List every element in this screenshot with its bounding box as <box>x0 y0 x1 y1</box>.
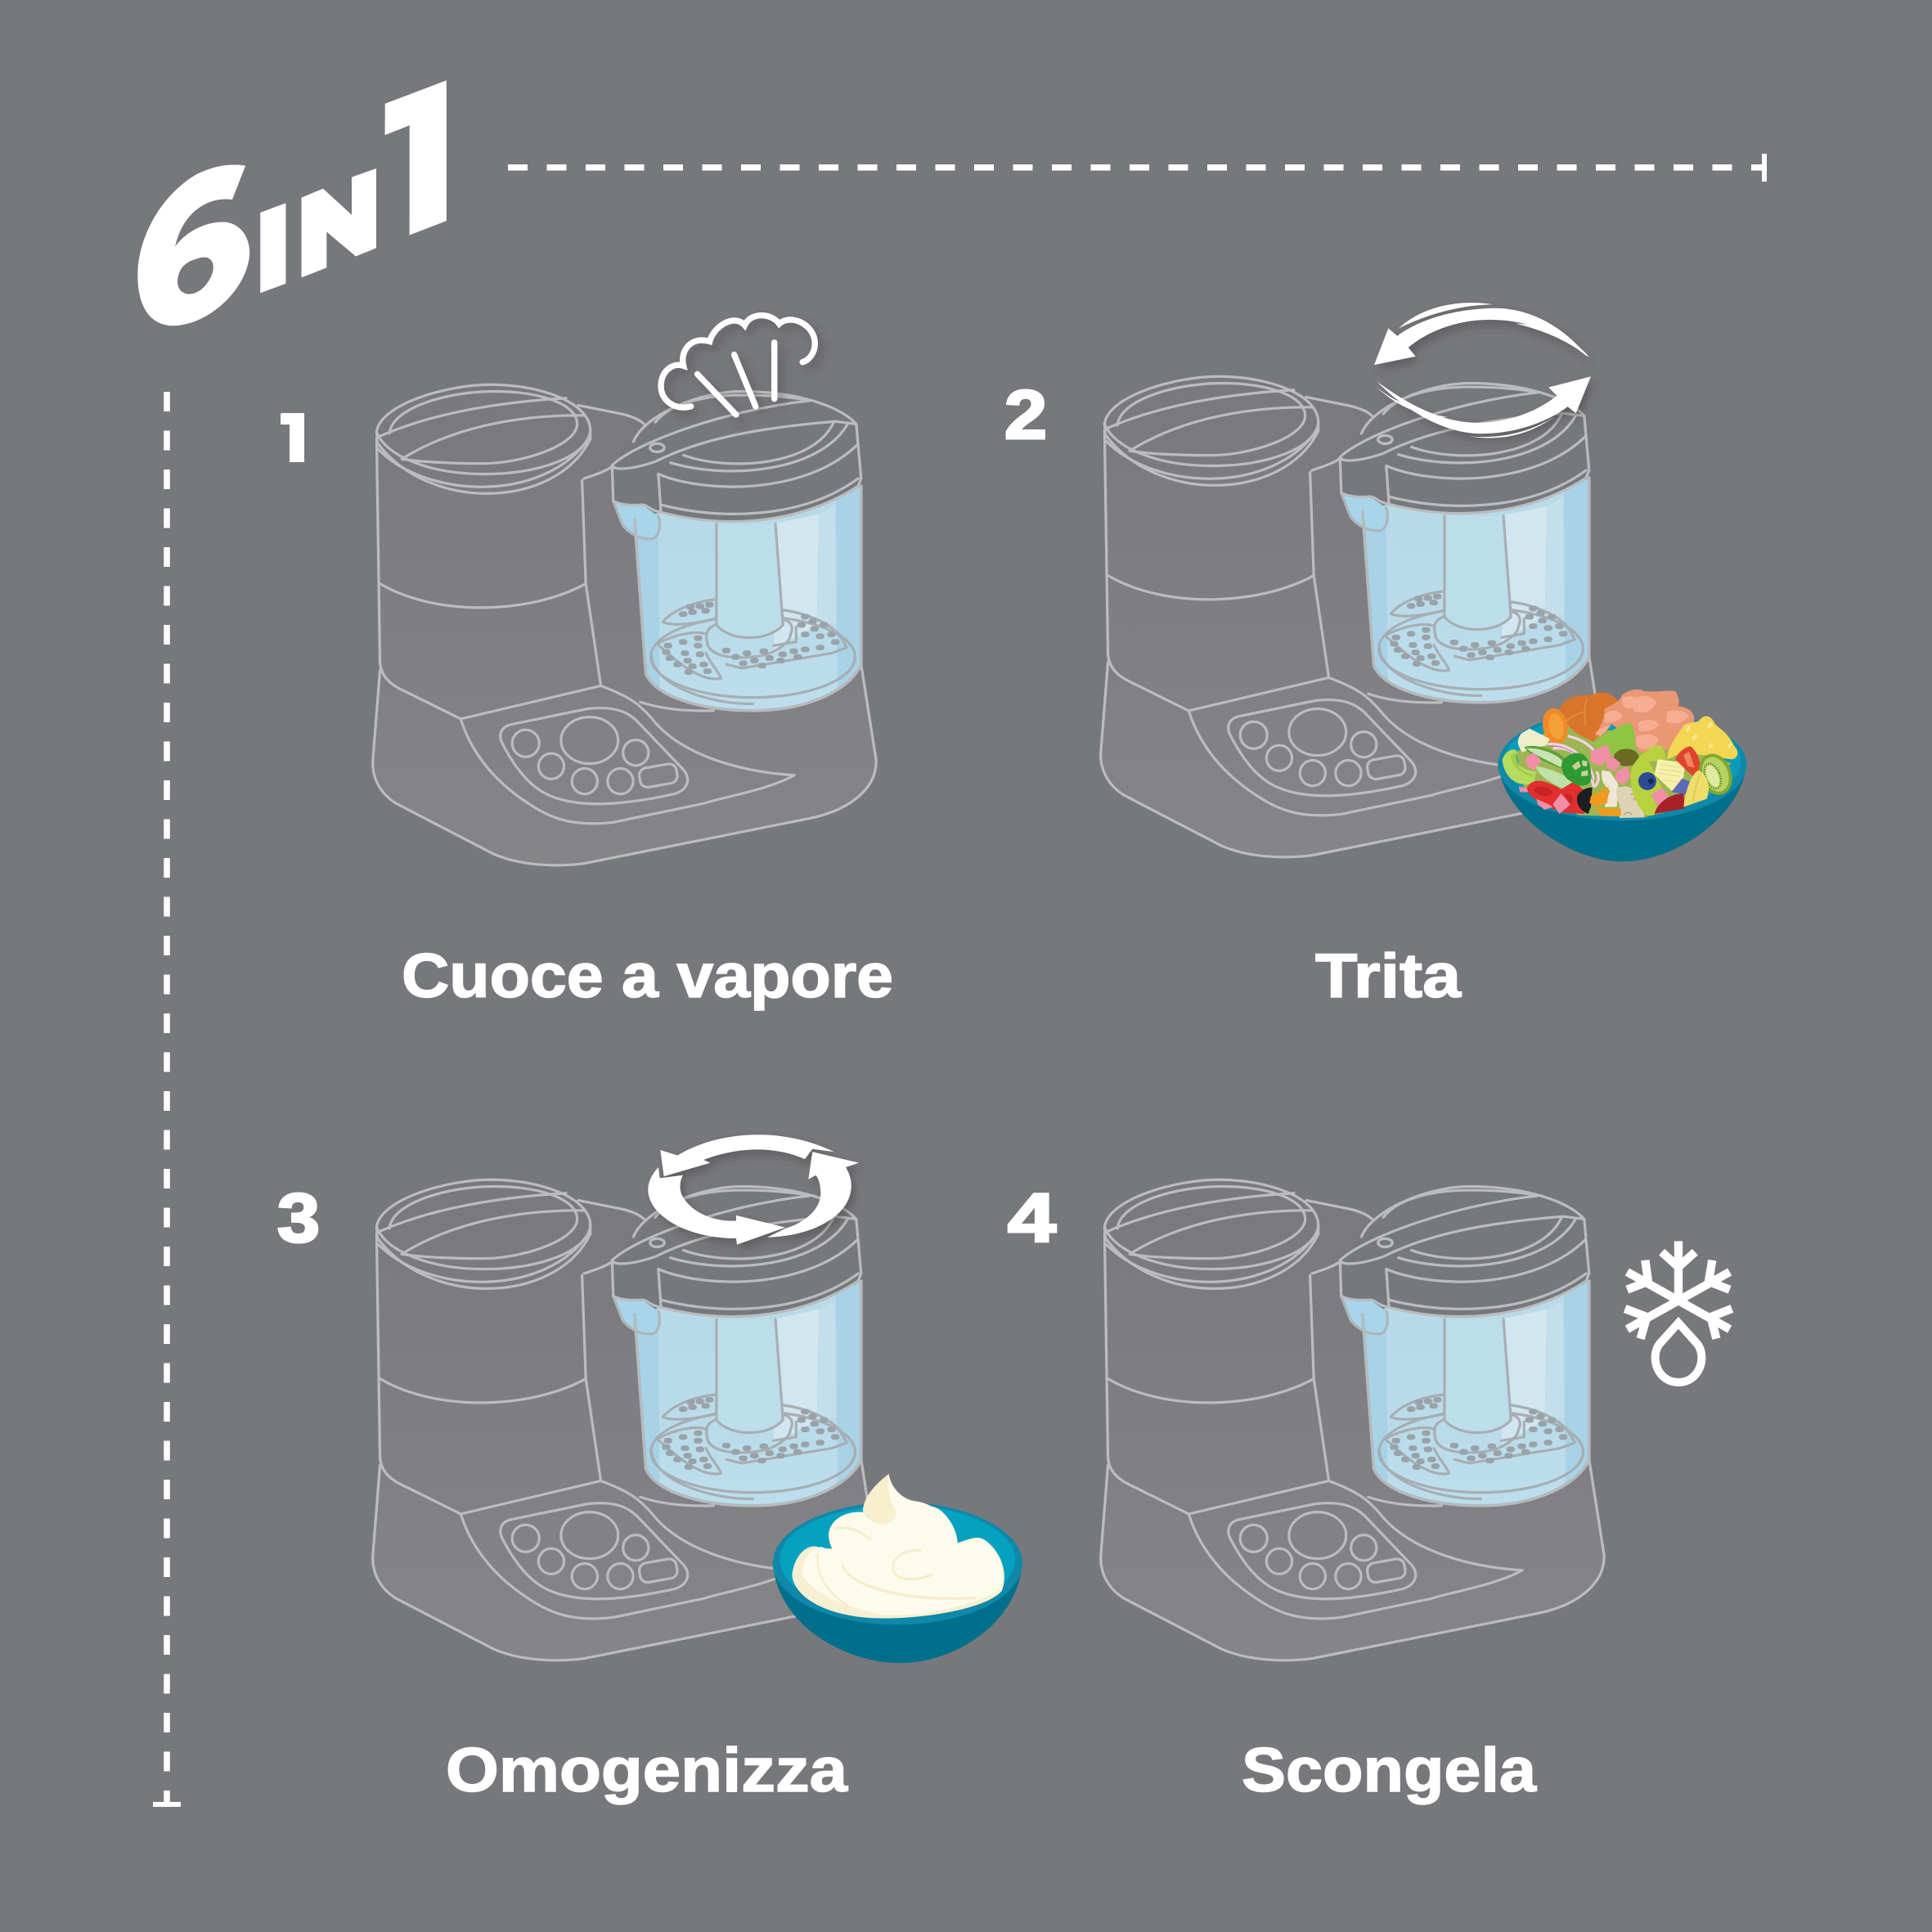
tomato and salami <box>1527 781 1589 814</box>
title: 6 in 1 <box>115 12 513 380</box>
jalapeno <box>1562 753 1591 785</box>
bowl of chopped salad <box>1498 690 1746 861</box>
feta block left <box>1518 729 1550 753</box>
mushrooms <box>1602 771 1618 807</box>
bowl body <box>773 1566 1022 1663</box>
olive brown <box>1614 748 1639 766</box>
step 2 machine <box>1101 376 1604 857</box>
ham cubes <box>1519 744 1669 814</box>
step 4 label: Scongela <box>1242 1736 1537 1805</box>
icon: blend arrows <box>648 1134 859 1245</box>
bowl of cream <box>773 1474 1022 1663</box>
title: 6 in 1: 1 <box>352 12 513 302</box>
blueberry <box>1638 772 1656 790</box>
step 3 number: 3 <box>277 1179 320 1256</box>
title: 6 in 1: 6 <box>115 97 276 380</box>
dashed line: top <box>508 154 1764 182</box>
lettuce <box>1593 722 1635 754</box>
bowl rim <box>773 1502 1022 1624</box>
bowl rim <box>1498 709 1746 820</box>
corn and pineapple <box>1667 716 1737 759</box>
banana slice <box>1683 771 1709 807</box>
carrot slice <box>1540 706 1570 747</box>
icon: snowflake and drop <box>1625 1241 1732 1382</box>
dashed line: left <box>153 392 181 1804</box>
salmon pile <box>1595 690 1695 753</box>
step 2 label: Trita <box>1315 941 1462 1011</box>
step 3 label: Omogenizza <box>446 1736 848 1805</box>
title: 6 in 1: IN <box>250 142 380 321</box>
butter block <box>1655 759 1686 791</box>
bowl interior <box>780 1505 1015 1615</box>
step 1 label: Cuoce a vapore <box>402 941 893 1011</box>
icon: steam cloud <box>661 316 815 415</box>
kiwi <box>1693 748 1738 800</box>
cream <box>792 1538 1004 1619</box>
step 2 number: 2 <box>1004 376 1047 453</box>
step 1 number: 1 <box>275 400 313 477</box>
avocado crescent <box>1503 749 1536 784</box>
cucumber pieces <box>1524 746 1565 769</box>
avocado slice <box>1630 745 1666 815</box>
step 3 machine <box>373 1179 876 1660</box>
bowl body <box>1498 763 1746 861</box>
carrot pile <box>1560 693 1618 742</box>
bowl interior <box>1503 712 1741 811</box>
filler <box>1516 722 1732 817</box>
step 4 number: 4 <box>1008 1179 1056 1256</box>
blue plum <box>1671 779 1692 795</box>
black olive <box>1577 788 1593 814</box>
step 4 machine <box>1101 1179 1604 1660</box>
salami slice <box>1655 793 1685 814</box>
orange squash <box>1589 787 1621 815</box>
red onion rings <box>1548 736 1598 787</box>
strawberry <box>1675 747 1701 777</box>
icon: chop arrows <box>1374 303 1591 438</box>
step 1 machine <box>373 384 876 865</box>
